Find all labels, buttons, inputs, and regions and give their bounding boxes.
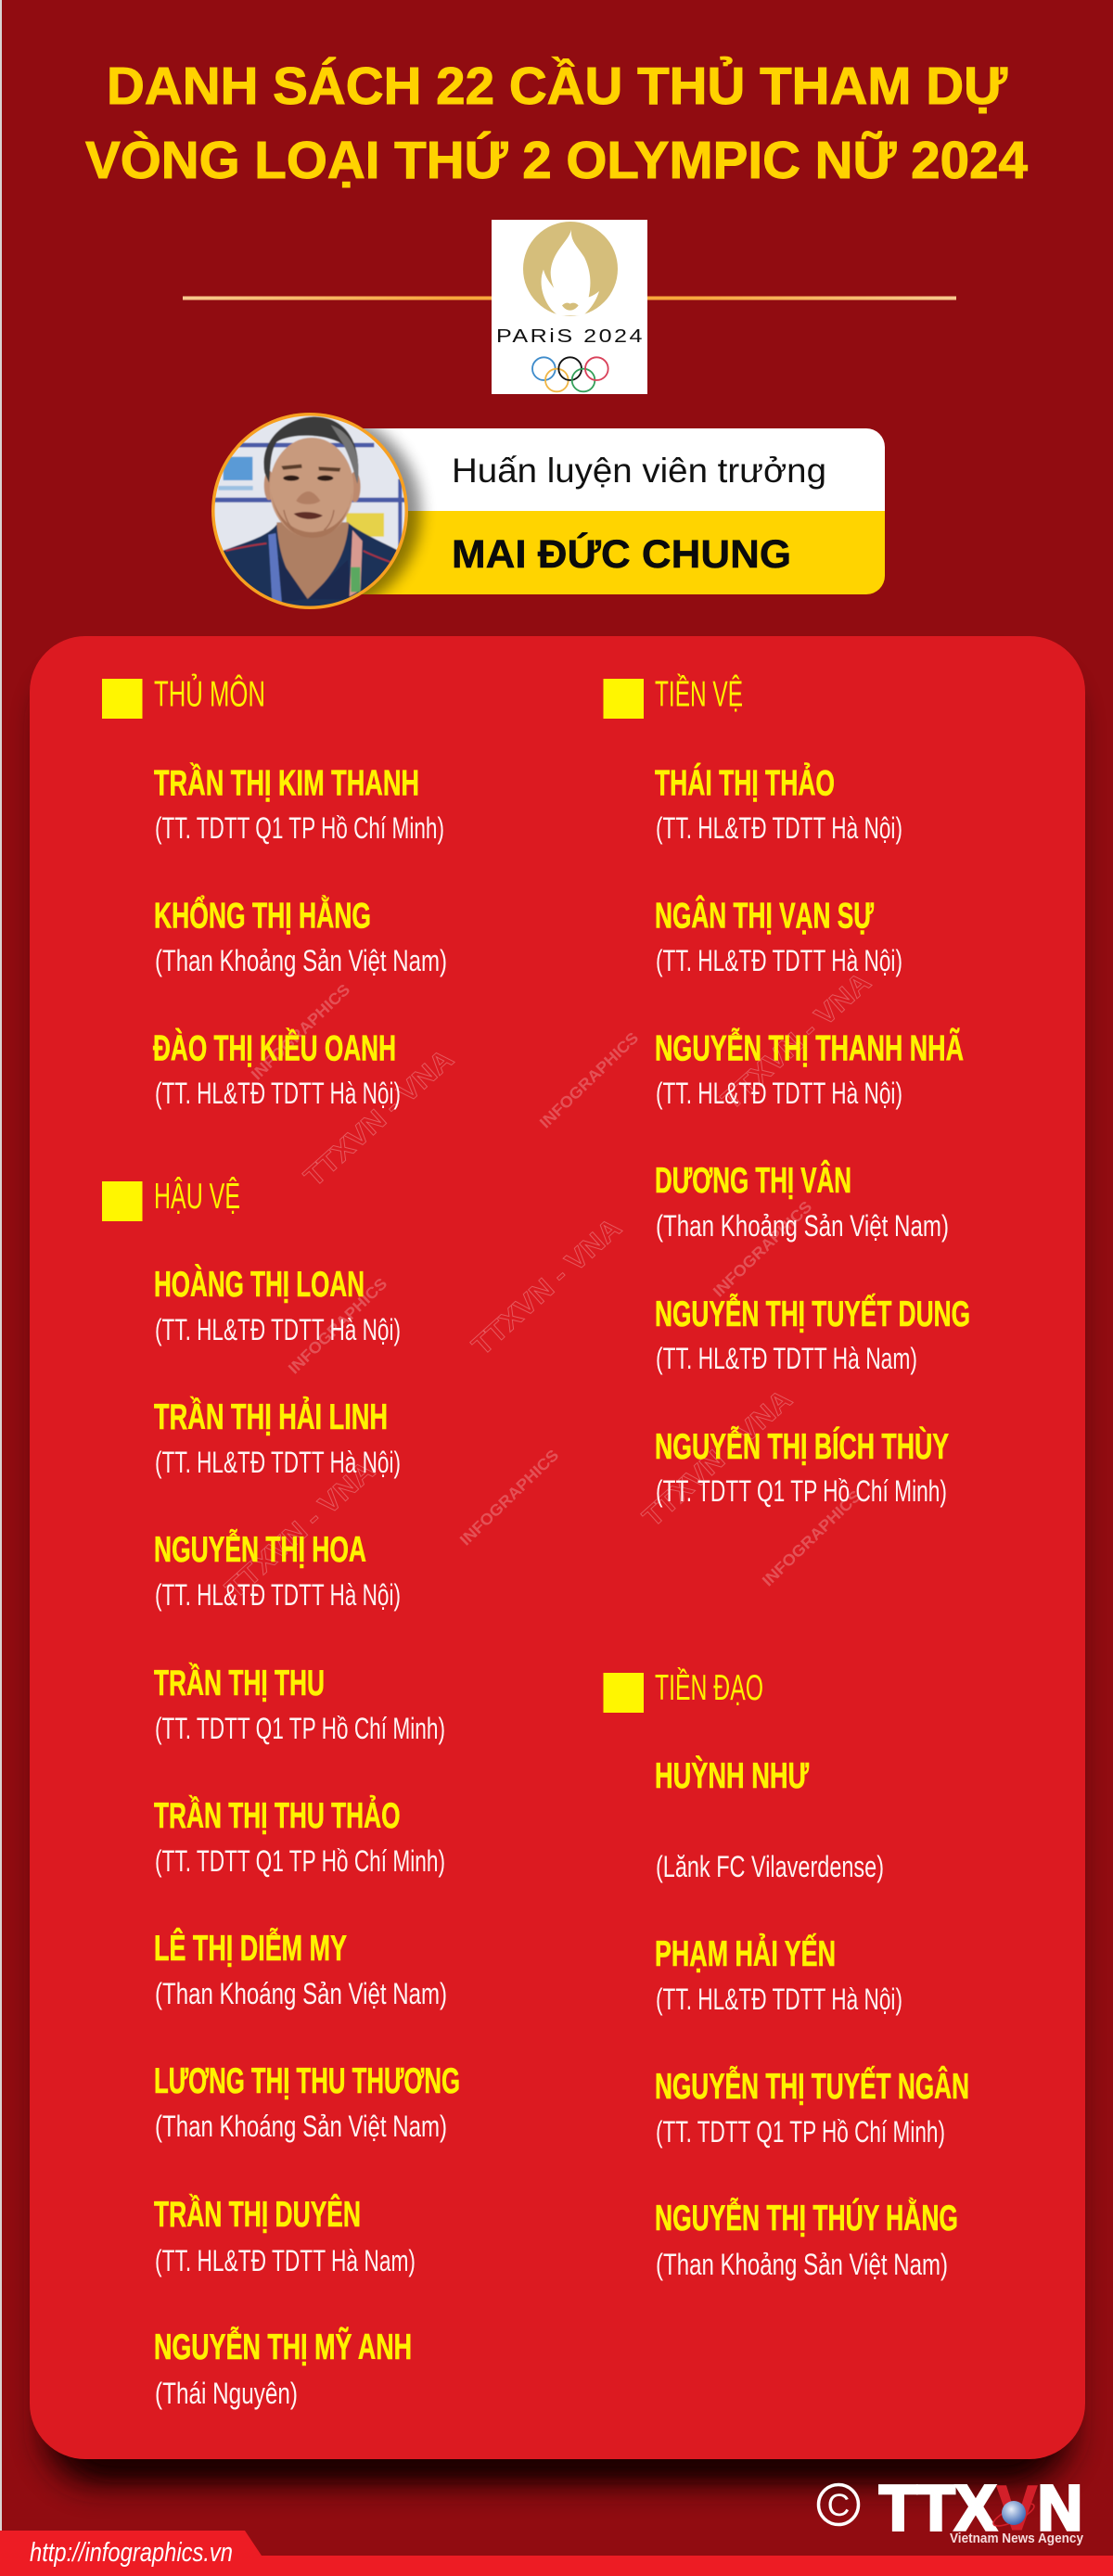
watermarks: INFOGRAPHICS — [710, 1198, 815, 1301]
player: Trần Thị Kim Thanh: TRẦN THỊ KIM THANH — [154, 762, 419, 803]
player: Trần Thị Thu Thảo: (TT. TDTT Q1 TP Hồ Chí Minh) — [155, 1844, 445, 1878]
player: Trần Thị Kim Thanh — [154, 762, 444, 845]
player: Nguyễn Thị Tuyết Ngân: (TT. TDTT Q1 TP Hồ Chí Minh) — [656, 2115, 945, 2149]
player: Ngân Thị Vạn Sự: (TT. HL&TĐ TDTT Hà Nội) — [656, 944, 902, 977]
player: Huỳnh Như: (Lănk FC Vilaverdense) — [656, 1850, 884, 1883]
coach name: MAI ĐỨC CHUNG — [452, 531, 791, 577]
heading: defenders — [102, 1177, 240, 1221]
heading: midfielders — [603, 673, 743, 719]
player: Ngân Thị Vạn Sự: NGÂN THỊ VẠN SỰ — [655, 896, 874, 937]
player: Huỳnh Như: HUỲNH NHƯ — [655, 1755, 809, 1796]
player: Hoàng Thị Loan: (TT. HL&TĐ TDTT Hà Nội) — [155, 1313, 401, 1346]
player: Trần Thị Thu Thảo — [154, 1795, 445, 1878]
player: Trần Thị Duyên: TRẦN THỊ DUYÊN — [154, 2194, 361, 2235]
player: Trần Thị Thu: (TT. TDTT Q1 TP Hồ Chí Minh) — [155, 1712, 445, 1745]
card: coach title row — [352, 428, 885, 511]
player: Nguyễn Thị Thúy Hằng: NGUYỄN THỊ THÚY HẰNG — [655, 2198, 958, 2238]
player: Lê Thị Diễm My: LÊ THỊ DIỄM MY — [154, 1928, 347, 1969]
copyright symbol: C — [827, 2488, 850, 2523]
player: Dương Thị Vân: (Than Khoảng Sản Việt Nam) — [656, 1209, 949, 1243]
player: Trần Thị Duyên: (TT. HL&TĐ TDTT Hà Nam) — [155, 2244, 416, 2277]
player: Khổng Thị Hằng: KHỔNG THỊ HẰNG — [154, 894, 371, 937]
heading: goalkeepers — [102, 673, 265, 719]
player: Nguyễn Thị Thúy Hằng — [655, 2198, 958, 2281]
title divider line — [183, 297, 956, 300]
player: Trần Thị Hải Linh: TRẦN THỊ HẢI LINH — [154, 1396, 388, 1437]
player: Thái Thị Thảo — [655, 762, 902, 845]
player: Khổng Thị Hằng: (Than Khoảng Sản Việt Nam) — [155, 944, 447, 977]
player: Nguyễn Thị Thúy Hằng: (Than Khoảng Sản Việt Nam) — [656, 2248, 948, 2281]
player: Nguyễn Thị Bích Thùy: (TT. TDTT Q1 TP Hồ Chí Minh) — [656, 1474, 947, 1508]
agency name: Vietnam News Agency — [950, 2531, 1084, 2546]
player: Hoàng Thị Loan — [154, 1264, 401, 1346]
player: Nguyễn Thị Mỹ Anh: NGUYỄN THỊ MỸ ANH — [154, 2327, 412, 2367]
panel shadow — [41, 668, 1074, 2487]
watermarks: INFOGRAPHICS — [759, 1487, 864, 1590]
heading: forwards — [603, 1667, 763, 1713]
player: Nguyễn Thị Tuyết Ngân — [655, 2066, 969, 2149]
player: Thái Thị Thảo: (TT. HL&TĐ TDTT Hà Nội) — [656, 811, 902, 845]
player: Đào Thị Kiều Oanh: ĐÀO THỊ KIỀU OANH — [153, 1027, 396, 1068]
player: Ngân Thị Vạn Sự — [655, 896, 902, 977]
panel: squad list — [30, 636, 1085, 2459]
watermarks: INFOGRAPHICS — [536, 1029, 642, 1132]
player: Phạm Hải Yến: PHẠM HẢI YẾN — [655, 1933, 836, 1974]
card: coach name row — [352, 511, 885, 594]
watermarks — [220, 966, 876, 1604]
watermarks: INFOGRAPHICS — [456, 1447, 562, 1549]
watermarks: TTXVN - VNA — [716, 966, 876, 1116]
player: Nguyễn Thị Tuyết Dung — [655, 1294, 970, 1375]
player: Nguyễn Thị Hoa: NGUYỄN THỊ HOA — [154, 1529, 366, 1570]
title: DANH SÁCH 22 CẦU THỦ THAM DỰ — [107, 56, 1008, 116]
watermarks: TTXVN - VNA — [220, 1455, 380, 1604]
player: Nguyễn Thị Thanh Nhã — [655, 1027, 964, 1110]
coach role: Huấn luyện viên trưởng — [452, 452, 826, 490]
player: Trần Thị Kim Thanh: (TT. TDTT Q1 TP Hồ Chí Minh) — [155, 811, 444, 845]
footer url: http://infographics.vn — [30, 2538, 233, 2568]
watermarks: TTXVN - VNA — [299, 1043, 459, 1192]
watermarks: INFOGRAPHICS — [248, 981, 353, 1084]
player: Thái Thị Thảo: THÁI THỊ THẢO — [655, 762, 835, 803]
logo: Paris 2024: PARiS 2024 — [496, 326, 645, 347]
player: Trần Thị Thu Thảo: TRẦN THỊ THU THẢO — [154, 1795, 401, 1836]
player: Trần Thị Hải Linh — [154, 1396, 401, 1479]
heading: defenders: HẬU VỆ — [154, 1177, 240, 1217]
player: Nguyễn Thị Tuyết Dung: NGUYỄN THỊ TUYẾT DUNG — [655, 1294, 970, 1334]
player: Trần Thị Thu: TRẦN THỊ THU — [154, 1663, 325, 1703]
player: Nguyễn Thị Thanh Nhã: (TT. HL&TĐ TDTT Hà Nội) — [656, 1077, 902, 1110]
title — [85, 56, 1028, 190]
watermarks: TTXVN - VNA — [467, 1212, 627, 1361]
player: Lê Thị Diễm My — [154, 1928, 447, 2010]
player: Nguyễn Thị Bích Thùy: NGUYỄN THỊ BÍCH THÙY — [655, 1426, 949, 1467]
player: Trần Thị Duyên — [154, 2194, 416, 2277]
coach photo — [204, 408, 415, 612]
player: Dương Thị Vân: DƯƠNG THỊ VÂN — [655, 1160, 851, 1201]
player: Nguyễn Thị Hoa — [154, 1529, 401, 1612]
player: Lương Thị Thu Thương: (Than Khoáng Sản Việt Nam) — [155, 2110, 447, 2143]
heading: goalkeepers: THỦ MÔN — [154, 673, 265, 714]
title: VÒNG LOẠI THỨ 2 OLYMPIC NỮ 2024 — [85, 131, 1028, 190]
logo: Paris 2024 — [492, 220, 647, 394]
footer band — [0, 2531, 1113, 2576]
player: Đào Thị Kiều Oanh: (TT. HL&TĐ TDTT Hà Nội) — [155, 1077, 401, 1110]
player: Nguyễn Thị Mỹ Anh: (Thái Nguyên) — [155, 2377, 298, 2410]
player: Lương Thị Thu Thương — [154, 2061, 460, 2143]
player: Khổng Thị Hằng — [154, 894, 447, 977]
player: Nguyễn Thị Bích Thùy — [655, 1426, 949, 1508]
player: Nguyễn Thị Thanh Nhã: NGUYỄN THỊ THANH NHÃ — [655, 1027, 964, 1068]
coach card — [362, 428, 885, 594]
copyright symbol — [818, 2485, 859, 2524]
player: Trần Thị Thu — [154, 1663, 445, 1745]
player: Phạm Hải Yến — [655, 1933, 902, 2016]
player: Hoàng Thị Loan: HOÀNG THỊ LOAN — [154, 1264, 365, 1305]
player: Phạm Hải Yến: (TT. HL&TĐ TDTT Hà Nội) — [656, 1983, 902, 2016]
player: Dương Thị Vân — [655, 1160, 949, 1243]
player: Trần Thị Hải Linh: (TT. HL&TĐ TDTT Hà Nội) — [155, 1446, 401, 1479]
player: Nguyễn Thị Mỹ Anh — [154, 2327, 412, 2410]
player: Lương Thị Thu Thương: LƯƠNG THỊ THU THƯƠNG — [154, 2061, 460, 2101]
heading: forwards: TIỀN ĐẠO — [655, 1667, 763, 1708]
watermarks: TTXVN - VNA — [637, 1384, 798, 1533]
player: Lê Thị Diễm My: (Than Khoáng Sản Việt Nam) — [155, 1977, 447, 2010]
icon: globe — [991, 2500, 1037, 2530]
player: Nguyễn Thị Hoa: (TT. HL&TĐ TDTT Hà Nội) — [155, 1578, 401, 1612]
player: Nguyễn Thị Tuyết Dung: (TT. HL&TĐ TDTT Hà Nam) — [656, 1342, 917, 1375]
player: Đào Thị Kiều Oanh — [153, 1027, 401, 1110]
logo: TTXVN: TTXVN — [879, 2472, 1082, 2544]
player: Nguyễn Thị Tuyết Ngân: NGUYỄN THỊ TUYẾT NGÂN — [655, 2066, 969, 2107]
watermarks: INFOGRAPHICS — [285, 1275, 390, 1378]
heading: midfielders: TIỀN VỆ — [655, 673, 743, 714]
player: Huỳnh Như — [655, 1755, 884, 1883]
